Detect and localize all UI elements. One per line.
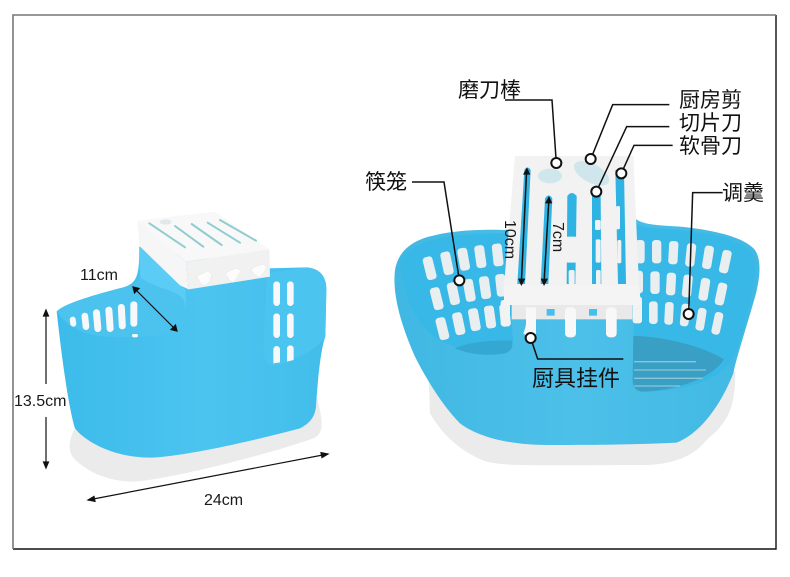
tower inner wall (139, 247, 186, 332)
dimension arrows on rack (518, 167, 552, 286)
label: 7cm: 7cm (549, 222, 566, 252)
left compartment back wall (400, 233, 513, 354)
right basket slots (634, 240, 732, 335)
dimension arrows: side view (44, 287, 328, 501)
rack hook windows (547, 309, 597, 316)
base tray (70, 398, 322, 482)
label: boning knife: 软骨刀 (679, 135, 742, 158)
knife rack top (137, 212, 269, 262)
slot see-through highlights (566, 206, 621, 285)
left compartment floor (455, 341, 512, 355)
knife rack slots (149, 220, 256, 247)
knife rack slots (517, 167, 626, 284)
blue body (57, 247, 326, 458)
callout dots (454, 154, 694, 343)
knife rack round holes (538, 156, 613, 191)
knife rack top (503, 156, 639, 293)
right compartment interior (263, 267, 326, 365)
label: kitchen scissors: 厨房剪 (679, 89, 742, 112)
right compartment floor (633, 336, 724, 392)
label: 11cm: 11cm (80, 267, 118, 284)
left basket slots (422, 243, 511, 341)
knife rack hole (160, 219, 172, 225)
product: caddy side view (57, 212, 326, 482)
left compartment interior (57, 277, 185, 337)
label: chopstick cage: 筷笼 (365, 171, 407, 194)
rack legs (501, 297, 642, 326)
label: 13.5cm: 13.5cm (14, 393, 66, 410)
right compartment back wall (633, 223, 755, 392)
left compartment slots (69, 301, 138, 337)
rack hooks (197, 264, 267, 286)
rack front bar (504, 285, 641, 305)
label: slicing knife: 切片刀 (679, 112, 742, 135)
label: 24cm: 24cm (204, 492, 243, 509)
right compartment slots (273, 281, 294, 363)
label: utensil hooks: 厨具挂件 (532, 366, 620, 391)
rack lower inset (512, 305, 632, 319)
kitchen hooks (523, 307, 617, 337)
blue body (394, 218, 760, 445)
knife rack front (186, 249, 270, 289)
label: soup spoon: 调羹 (722, 182, 764, 205)
product: caddy top view (394, 100, 760, 465)
callout leader lines (412, 100, 723, 359)
knife rack side (137, 221, 189, 289)
label: 10cm: 10cm (501, 220, 518, 259)
floor ribs (634, 362, 706, 386)
label: sharpening rod: 磨刀棒 (458, 79, 521, 102)
base tray (428, 370, 735, 465)
